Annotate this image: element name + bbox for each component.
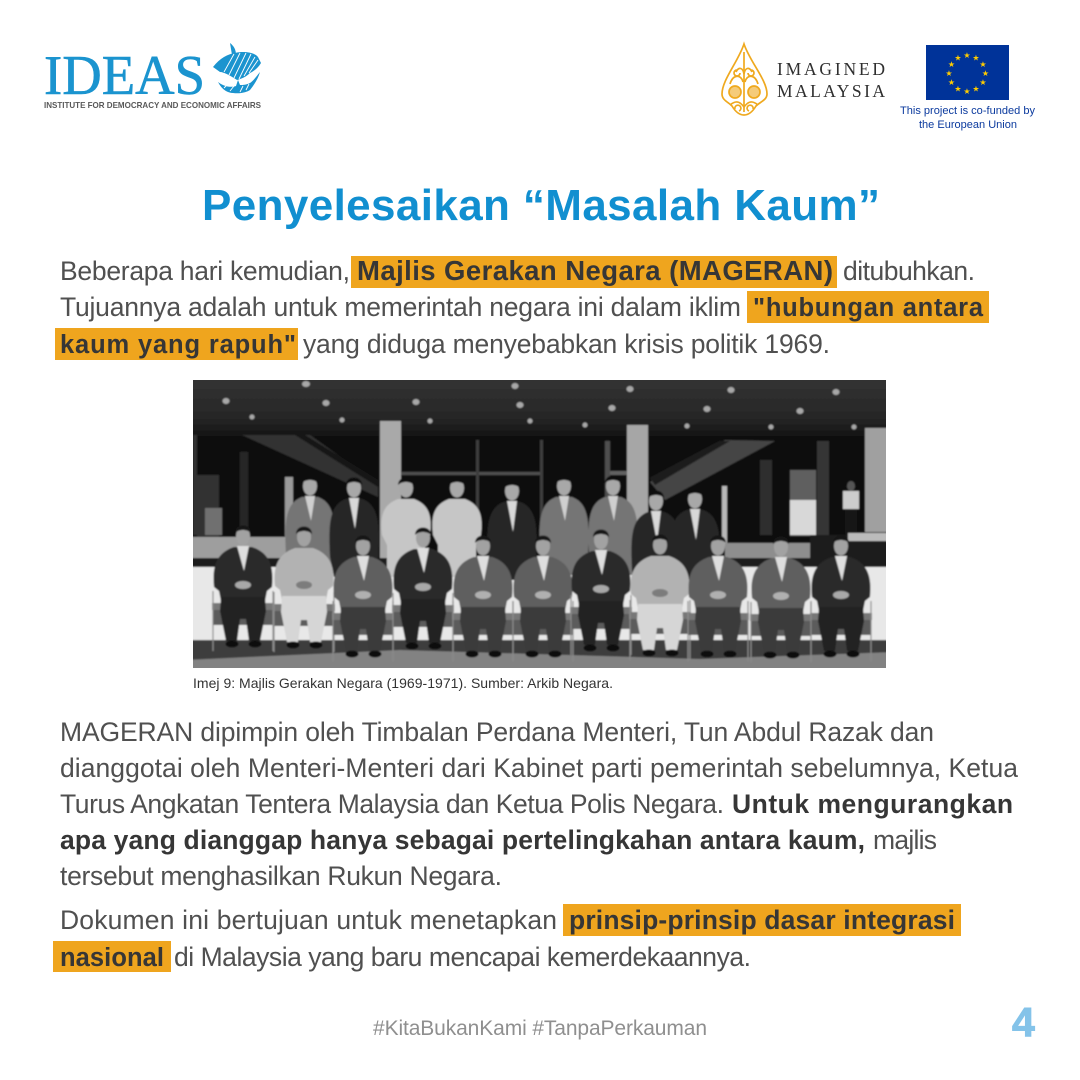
icon: EU flag: ★	[948, 78, 955, 87]
hashtags: #KitaBukanKami #TanpaPerkauman	[373, 1017, 707, 1040]
standing row	[284, 478, 333, 564]
stairs	[242, 435, 378, 497]
icon: EU flag	[926, 45, 1009, 100]
text block: MAGERAN paragraph: tersebut menghasilkan Rukun Negara.	[60, 861, 502, 891]
text block: MAGERAN paragraph: apa yang dianggap hanya sebagai pertelingkahan antara kaum,	[60, 825, 865, 855]
text block: MAGERAN paragraph	[60, 717, 1018, 891]
logo: EU flag and funding note	[900, 45, 1035, 131]
icon: EU flag: ★	[979, 78, 987, 87]
highlight: Majlis Gerakan Negara	[351, 256, 837, 288]
title: Penyelesaikan “Masalah Kaum”	[202, 181, 880, 230]
highlight: hubungan antara	[747, 291, 989, 323]
text block: intro paragraph: "hubungan antara	[753, 294, 984, 322]
text block: intro paragraph	[55, 255, 989, 360]
logo: Imagined Malaysia	[722, 44, 885, 115]
ground	[193, 649, 886, 668]
text block: document paragraph: di Malaysia yang baru mencapai kemerdekaannya.	[174, 942, 751, 972]
icon: EU flag: ★	[972, 84, 980, 94]
caption: Imej 9: Majlis Gerakan Negara (1969-1971). Sumber: Arkib Negara.	[193, 675, 613, 691]
text block: document paragraph: nasional	[60, 944, 164, 972]
text block: intro paragraph: kaum yang rapuh"	[60, 331, 296, 359]
text block: intro paragraph: Tujuannya adalah untuk memerintah negara ini dalam iklim	[60, 292, 741, 322]
icon: EU flag: ★	[972, 54, 980, 62]
icon: EU flag: ★	[954, 84, 962, 94]
ceiling lamps	[222, 381, 856, 430]
highlight: kaum yang rapuh	[55, 328, 298, 360]
icon: EU flag: ★	[982, 69, 989, 78]
logo: Imagined Malaysia: MALAYSIA	[777, 81, 885, 101]
text block: intro paragraph: Beberapa hari kemudian,	[60, 256, 350, 286]
icon: IDEAS bird	[213, 43, 261, 93]
logo: EU flag and funding note: the European Union	[919, 119, 1017, 131]
logo: IDEAS: INSTITUTE FOR DEMOCRACY AND ECONOMIC AFFAIRS	[44, 101, 262, 110]
icon: EU flag: ★	[954, 54, 962, 62]
text block: document paragraph: prinsip-prinsip dasar integrasi	[569, 905, 955, 935]
icon: EU flag: ★	[979, 60, 987, 69]
icon: gold wayang leaf	[722, 44, 767, 115]
logo: Imagined Malaysia: IMAGINED	[777, 59, 885, 79]
logo: EU flag and funding note: This project is co-funded by	[900, 105, 1035, 117]
text block: intro paragraph: ditubuhkan.	[843, 256, 975, 286]
seated row	[212, 526, 274, 651]
icon: EU flag: ★	[948, 60, 955, 69]
wall and terrace bands	[190, 537, 293, 558]
highlight: prinsip-prinsip	[563, 904, 961, 936]
columns	[380, 421, 401, 571]
photo: Majlis Gerakan Negara members	[193, 380, 886, 668]
page number: 4	[1012, 999, 1035, 1045]
icon: EU flag: ★	[963, 51, 971, 60]
text block: MAGERAN paragraph: MAGERAN dipimpin oleh Timbalan Perdana Menteri, Tun Abdul Razak dan	[60, 717, 934, 747]
window frames	[193, 435, 197, 535]
highlight: nasional	[53, 941, 171, 972]
text block: document paragraph	[53, 904, 961, 972]
text block: intro paragraph: Majlis Gerakan Negara (MAGERAN)	[357, 255, 833, 286]
text block: MAGERAN paragraph: Untuk mengurangkan	[732, 789, 1013, 819]
icon: EU flag: ★	[945, 69, 953, 78]
text block: MAGERAN paragraph: dianggotai oleh Menteri-Menteri dari Kabinet parti pemerintah sebelumnya, Ketua	[60, 753, 1018, 783]
text block: MAGERAN paragraph: majlis	[873, 825, 937, 855]
text block: document paragraph: Dokumen ini bertujuan untuk menetapkan	[60, 905, 557, 935]
icon: EU flag: ★	[963, 87, 971, 96]
background figure	[847, 481, 855, 491]
text block: intro paragraph: yang diduga menyebabkan krisis politik 1969.	[303, 329, 830, 359]
text block: MAGERAN paragraph: Turus Angkatan Tentera Malaysia dan Ketua Polis Negara.	[60, 789, 724, 819]
logo: IDEAS: IDEAS	[44, 45, 205, 107]
